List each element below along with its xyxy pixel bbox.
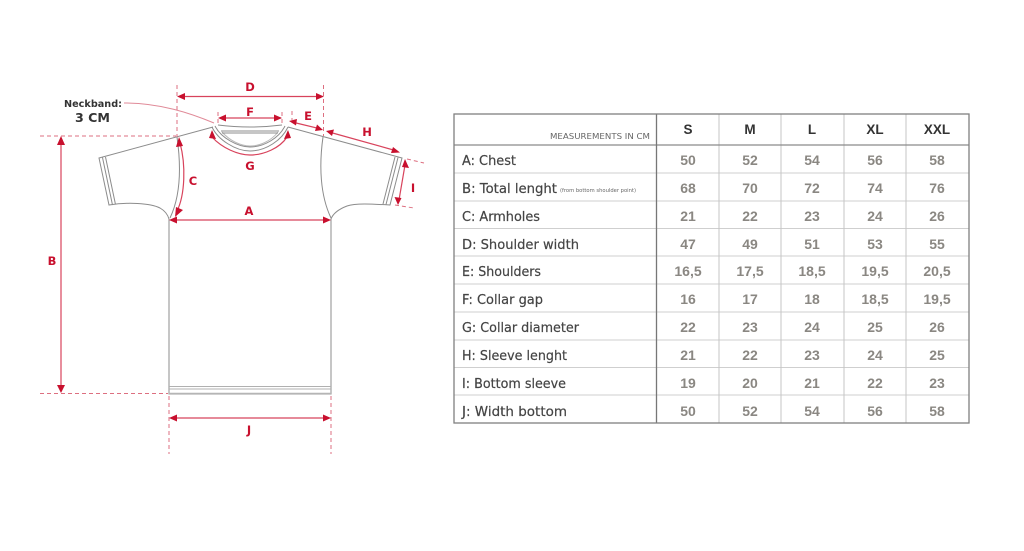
dimension C	[175, 137, 197, 217]
row: shoulders	[462, 263, 951, 280]
row: shoulder width: 53	[867, 236, 883, 252]
row: chest: 58	[929, 152, 945, 168]
dimension C: C	[189, 174, 197, 188]
row: shoulder width: D: Shoulder width	[462, 238, 579, 253]
dimension A	[169, 204, 331, 224]
row: armholes: 21	[680, 208, 696, 224]
table header: XL	[866, 122, 884, 137]
dimension I: I	[411, 181, 415, 195]
row: sleeve length: H: Sleeve lenght	[462, 349, 567, 364]
table header: M	[744, 122, 756, 137]
row: sleeve length: 21	[680, 347, 696, 363]
neckband callout: 3 CM	[75, 110, 110, 125]
table header: S	[683, 122, 693, 137]
row: bottom sleeve: I: Bottom sleeve	[462, 377, 566, 392]
row: shoulders: 19,5	[861, 263, 889, 279]
row: collar gap: 19,5	[923, 291, 951, 307]
row: collar diameter: 25	[867, 319, 883, 335]
row: width bottom: 56	[867, 403, 883, 419]
row: collar diameter: 22	[680, 319, 696, 335]
row: armholes: 22	[742, 208, 758, 224]
row: shoulders: 16,5	[674, 263, 702, 279]
row: width bottom: 52	[742, 403, 758, 419]
guide lines	[40, 85, 424, 454]
row: armholes	[462, 208, 945, 225]
row: shoulders: 20,5	[923, 263, 951, 279]
table header: XXL	[924, 122, 950, 137]
row: sleeve length	[462, 347, 945, 364]
row: total length: (from bottom shoulder point)	[560, 188, 636, 194]
row: armholes: 24	[867, 208, 883, 224]
row: shoulder width: 55	[929, 236, 945, 252]
row: bottom sleeve: 19	[680, 375, 696, 391]
row: chest: 54	[804, 152, 820, 168]
dimension F: F	[246, 105, 254, 119]
row: sleeve length: 23	[804, 347, 820, 363]
row: chest	[462, 152, 945, 169]
row: collar gap	[462, 291, 951, 308]
dimension E: E	[304, 109, 312, 123]
row: total length: 68	[680, 180, 696, 196]
dimension I	[394, 159, 415, 205]
row: bottom sleeve: 21	[804, 375, 820, 391]
table grid	[454, 114, 969, 423]
row: shoulders: 17,5	[736, 263, 764, 279]
row: collar diameter: G: Collar diameter	[462, 321, 580, 336]
row: collar gap: F: Collar gap	[462, 293, 543, 308]
row: shoulder width: 49	[742, 236, 758, 252]
row: width bottom	[461, 403, 945, 420]
row: armholes: 23	[804, 208, 820, 224]
row: bottom sleeve: 20	[742, 375, 758, 391]
t-shirt outline	[99, 125, 402, 394]
dimension D	[177, 80, 324, 100]
row: width bottom: 50	[680, 403, 696, 419]
row: shoulder width: 47	[680, 236, 696, 252]
dimension F	[218, 105, 282, 122]
dimension H	[326, 125, 400, 153]
dimension G	[209, 130, 291, 173]
row: width bottom: 54	[804, 403, 820, 419]
row: collar gap: 18	[804, 291, 820, 307]
row: collar gap: 16	[680, 291, 696, 307]
row: chest: A: Chest	[462, 154, 516, 169]
row: total length: 70	[742, 180, 758, 196]
row: collar diameter	[462, 319, 945, 336]
size table	[454, 114, 969, 423]
table header: L	[808, 122, 816, 137]
table header	[550, 122, 950, 141]
neckband callout	[64, 99, 214, 125]
t-shirt diagram	[40, 80, 424, 454]
dimension D: D	[245, 80, 255, 94]
dimension J	[169, 414, 331, 437]
row: collar diameter: 23	[742, 319, 758, 335]
row: total length: 76	[929, 180, 945, 196]
row: collar gap: 17	[742, 291, 758, 307]
row: chest: 52	[742, 152, 758, 168]
dimension G: G	[245, 159, 255, 173]
dimension J: J	[246, 423, 251, 437]
dimension B: B	[48, 254, 56, 268]
dimension A: A	[245, 204, 254, 218]
row: width bottom: J: Width bottom	[461, 405, 567, 420]
row: sleeve length: 22	[742, 347, 758, 363]
row: bottom sleeve	[462, 375, 945, 392]
neckband callout: Neckband:	[64, 99, 122, 110]
row: chest: 50	[680, 152, 696, 168]
table header: MEASUREMENTS IN CM	[550, 132, 650, 141]
row: shoulders: E: Shoulders	[462, 265, 541, 280]
row: armholes: 26	[929, 208, 945, 224]
row: sleeve length: 24	[867, 347, 883, 363]
row: shoulder width: 51	[804, 236, 820, 252]
dimension B	[48, 136, 65, 393]
row: chest: 56	[867, 152, 883, 168]
dimension E	[289, 109, 323, 131]
dimension H: H	[362, 125, 372, 139]
row: sleeve length: 25	[929, 347, 945, 363]
row: collar diameter: 26	[929, 319, 945, 335]
row: shoulder width	[462, 236, 945, 253]
row: armholes: C: Armholes	[462, 210, 540, 225]
row: shoulders: 18,5	[798, 263, 826, 279]
row: bottom sleeve: 23	[929, 375, 945, 391]
row: total length	[462, 180, 945, 197]
row: total length: 72	[804, 180, 820, 196]
row: collar gap: 18,5	[861, 291, 889, 307]
row: bottom sleeve: 22	[867, 375, 883, 391]
row: total length: 74	[867, 180, 883, 196]
row: collar diameter: 24	[804, 319, 820, 335]
row: width bottom: 58	[929, 403, 945, 419]
row: total length: B: Total lenght	[462, 182, 557, 197]
